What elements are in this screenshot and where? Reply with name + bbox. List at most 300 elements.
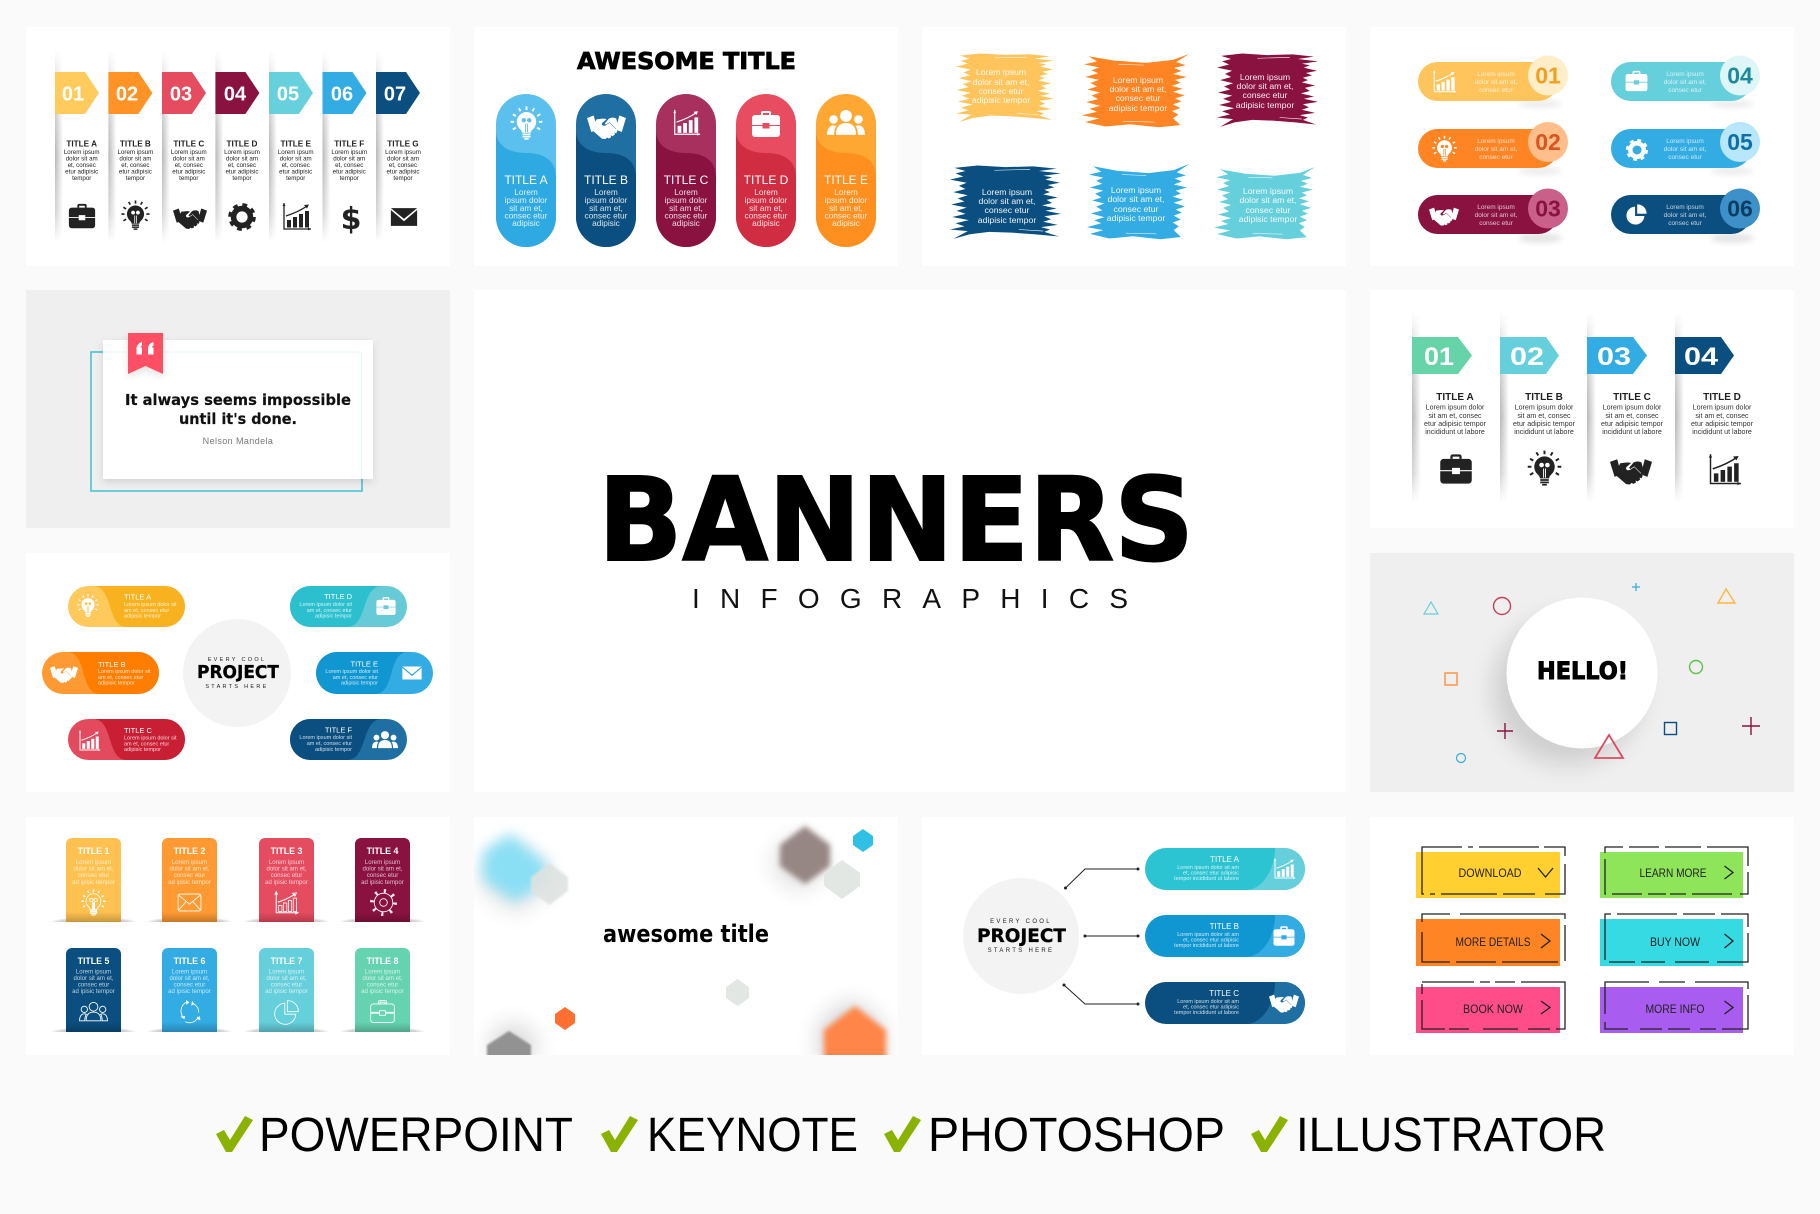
button: buy now [1600,914,1748,966]
card 8 [339,948,426,1032]
column 02: Lorem ipsum dolor [1515,404,1574,412]
card 2: ad ipisic tempor [168,879,211,886]
panel: every cool project with six pills [26,553,450,792]
pill 02: dolor sit am et, [1475,146,1518,153]
brush teal: adipisic tempor [1239,214,1297,224]
column 04 [1675,337,1754,485]
column 03: dolor sit am [173,156,205,162]
card 2: dolor sit am et, [170,866,210,872]
pill C: Lorem [674,187,698,197]
column 01: Lorem ipsum [64,149,100,156]
card 2: Lorem ipsum [172,859,207,866]
brush navy [950,166,1061,239]
panel: quote card [26,290,450,528]
pill A: tempor incididunt ut labore [1174,876,1239,882]
brush yellow: dolor sit am et, [973,77,1029,87]
pill C [1145,982,1305,1024]
pill 03: 03 [1535,196,1561,222]
small blue hexagon [853,829,873,852]
column 01: Lorem ipsum dolor [1426,404,1485,412]
card 8: TITLE 8 [367,956,398,966]
brush yellow: Lorem ipsum [976,67,1026,77]
pill 03: consec etur [1479,220,1514,227]
card 3 [243,838,330,922]
bookmark with quotation mark [128,333,163,374]
gray hexagon right [824,860,860,899]
column 05: et, consec [282,162,310,169]
pill E: TITLE E [350,660,378,668]
card 1 [50,838,137,922]
brush blue [1087,164,1189,239]
button: download: DOWNLOAD [1458,868,1522,880]
pill C: am et, consec etur [124,742,169,748]
column 03 [1587,337,1664,485]
panel: numbered pills [1370,27,1794,266]
pill B: TITLE B [584,173,628,187]
pill D: TITLE D [744,173,789,187]
pill B: ipsum dolor [585,195,628,205]
brush maroon: Lorem ipsum [1240,72,1290,82]
column 04: sit am et, consec [1695,412,1749,420]
pill D: adipisic tempor [315,614,352,620]
column 05 [269,72,314,230]
panel: center title [474,290,1346,792]
connector arrows [1062,868,1140,1006]
column 02: etur adipisic tempor [1513,420,1576,428]
column 03: Lorem ipsum dolor [1603,404,1662,412]
brush yellow: consec etur [979,86,1024,96]
card 5 [50,948,137,1032]
card 7: Lorem ipsum [269,968,304,976]
pill E [316,652,433,694]
pill F: adipisic tempor [315,747,352,753]
pill E [816,94,876,247]
column 03: 03 [170,84,192,106]
panel: seven numbered arrow columns [55,64,420,234]
pill 03: Lorem ipsum [1477,204,1515,211]
button: download [1416,847,1565,898]
column 01: TITLE A [1436,392,1474,403]
item: illustrator: ILLUSTRATOR [1296,1109,1606,1162]
column 02: Lorem ipsum [118,149,153,156]
column 03: 03 [1597,343,1631,371]
pill 05: Lorem ipsum [1666,138,1704,145]
pill E: adipisic [832,218,860,228]
card 7: ad ipisic tempor [265,988,308,995]
pill E: Lorem [834,187,858,197]
pill 05: dolor sit am et, [1664,146,1707,153]
card 3: Lorem ipsum [269,859,304,866]
column 04: dolor sit am [226,156,258,162]
center circle: PROJECT [197,663,279,683]
panel: hexagons with awesome title [474,824,892,1055]
quote text: until it's done. [179,410,297,428]
pill 05 [1611,122,1760,175]
pill C: et, consec etur adipisic [1183,1004,1239,1010]
column 03: tempor [179,175,198,182]
column 02: TITLE B [1525,392,1563,403]
pill 04: consec etur [1668,87,1703,94]
column 01: 01 [1424,343,1454,371]
card 4: consec etur [367,872,398,879]
decorative geometric shapes [1424,583,1760,762]
pill F: TITLE F [325,726,352,734]
pill D: Lorem ipsum dolor sit [299,602,352,608]
pill B: am et, consec etur [98,675,143,681]
column 03: TITLE C [173,140,204,148]
pill A: ipsum dolor [505,195,548,205]
pill E: Lorem ipsum dolor sit [325,669,378,675]
card 5: ad ipisic tempor [72,988,115,995]
column 02: 02 [1510,343,1544,371]
card 3: consec etur [271,872,302,879]
pill A: sit am et, [509,203,543,213]
column 06: $ [341,202,361,237]
pill A: TITLE A [124,592,151,602]
column 03: et, consec [175,162,203,169]
pill 05: 05 [1727,129,1753,155]
small orange hexagon [555,1007,575,1030]
column 01: et, consec [68,162,96,169]
panel: hello circle [1370,553,1794,792]
column 04: TITLE D [227,140,258,148]
column 04 [215,72,260,229]
card 2: TITLE 2 [174,846,205,856]
column 06 [322,72,367,237]
pill D: sit am et, [749,203,783,213]
pill 04 [1611,56,1760,108]
column 04: Lorem ipsum [224,149,260,156]
column 02: et, consec [121,162,150,169]
card 6: dolor sit am et, [170,975,210,982]
pill E: consec etur [825,210,868,220]
item: keynote: KEYNOTE [647,1109,858,1162]
brush orange: consec etur [1116,93,1161,103]
card 8: ad ipisic tempor [361,988,404,995]
card 8: dolor sit am et, [363,975,403,982]
column 02: incididunt ut labore [1514,428,1574,436]
card 3: dolor sit am et, [267,866,307,872]
pill 02 [1418,122,1568,175]
column 07: et, consec [389,162,417,169]
column 04: incididunt ut labore [1692,428,1752,436]
card 5: TITLE 5 [78,956,109,966]
card 1: ad ipisic tempor [72,879,115,886]
pill 01: 01 [1535,62,1561,88]
button: learn more [1600,847,1748,898]
brush blue: consec etur [1114,204,1159,214]
column 01: dolor sit am [66,156,98,162]
column 05: Lorem ipsum [278,149,314,156]
brush orange: dolor sit am et, [1110,84,1166,94]
pill 04: 04 [1727,62,1753,88]
card 6: TITLE 6 [174,956,205,966]
heading: awesome title: AWESOME TITLE [577,49,796,75]
pill E: sit am et, [829,203,863,213]
card 5: consec etur [78,982,109,988]
column 07: Lorem ipsum [385,149,421,156]
card 4: ad ipisic tempor [361,879,404,886]
card 1: TITLE 1 [78,846,109,856]
pill B: Lorem ipsum dolor sit am [1177,932,1239,938]
column 04: TITLE D [1703,392,1741,403]
card 6: Lorem ipsum [172,968,207,976]
pill C: tempor incididunt ut labore [1174,1010,1239,1016]
column 02: sit am et, consec [1517,412,1571,420]
panel: eight title cards [26,817,450,1055]
column 02: 02 [116,84,138,106]
pill A: consec etur [505,210,548,220]
pill B: sit am et, [589,203,623,213]
pill 03 [1418,188,1568,243]
pill B: consec etur [585,210,628,220]
column 07: dolor sit am [387,156,419,162]
column 06: dolor sit am [333,156,365,162]
pill D: consec etur [745,210,788,220]
card 8: consec etur [367,982,398,988]
pill F: am et, consec etur [307,741,352,747]
column 06: Lorem ipsum [331,149,367,156]
brush maroon: adipisic tempor [1236,100,1294,110]
column 01: etur adipisic [65,168,98,175]
center circle: STARTS HERE [205,684,269,690]
card 6: consec etur [174,982,205,988]
card 7 [243,948,330,1032]
quote text: It always seems impossible [125,391,351,409]
pill A: et, consec etur adipisic [1183,870,1239,876]
hello circle: HELLO! [1537,657,1628,685]
title text: awesome title [603,920,769,948]
card 1: dolor sit am et, [74,866,114,872]
button: more details: MORE DETAILS [1456,937,1531,949]
circle shadow [1493,615,1643,765]
hello circle [1506,598,1658,748]
column 01: etur adipisic tempor [1424,420,1487,428]
column 05: TITLE E [280,140,311,148]
column 02 [1500,337,1576,486]
card 7: TITLE 7 [271,956,302,966]
pill B [576,94,636,247]
pill 01: consec etur [1479,87,1514,94]
pill D: am et, consec etur [307,608,352,614]
column 04: 04 [224,84,247,106]
blurred orange hexagon [820,1000,886,1075]
pill C: adipisic [672,218,700,228]
column 02: dolor sit am [119,156,151,162]
brush orange [1082,54,1189,127]
pill B: adipisic tempor [98,680,135,686]
card 7: consec etur [271,982,302,988]
center circle: STARTS HERE [988,948,1054,954]
panel: brush strokes [922,27,1346,266]
pill F [290,719,407,760]
button: more details [1416,914,1565,966]
column 03: TITLE C [1613,392,1651,403]
author: Nelson Mandela [203,436,273,446]
pill C: adipisic tempor [124,747,161,753]
pill E: am et, consec etur [333,675,378,681]
pill B: et, consec etur adipisic [1183,938,1239,944]
column 04: etur adipisic [225,168,259,175]
column 01 [55,72,100,228]
pill C: Lorem ipsum dolor sit am [1177,999,1239,1005]
card 4: dolor sit am et, [363,866,403,872]
brush blue: Lorem ipsum [1111,185,1161,195]
pill A: am et, consec etur [124,608,169,614]
panel: project connector pills [922,817,1346,1055]
brush orange: Lorem ipsum [1113,75,1163,85]
brush blue: adipisic tempor [1107,213,1165,223]
brush navy: consec etur [985,205,1030,215]
center circle [183,619,291,727]
center circle [963,878,1079,994]
pill C: sit am et, [669,203,703,213]
pill D [736,94,796,247]
pill C: TITLE C [124,726,153,735]
column 02 [108,72,153,230]
pill A: TITLE A [1210,855,1240,864]
card 8: Lorem ipsum [365,968,400,976]
pill B: TITLE B [98,660,126,669]
button: more info: MORE INFO [1646,1004,1705,1016]
pill C [656,94,716,247]
column 04: etur adipisic tempor [1691,420,1754,428]
card 4: Lorem ipsum [365,859,400,866]
brush teal [1214,167,1315,239]
column 06: etur adipisic [333,168,366,175]
column 03: sit am et, consec [1605,412,1659,420]
brush maroon: dolor sit am et, [1237,81,1293,91]
pill E: adipisic tempor [341,680,378,686]
pill A [1145,848,1305,890]
card 1: consec etur [78,872,109,879]
column 01: TITLE A [66,140,97,148]
column 07: etur adipisic [386,168,420,175]
brush navy: dolor sit am et, [979,196,1035,206]
panel: awesome title pills [474,27,898,266]
column 01: 01 [62,84,84,106]
card 4 [339,838,426,922]
panel: call to action buttons [1370,817,1794,1055]
blurred blue hexagon [481,834,549,915]
pill A [68,586,185,627]
pill C: TITLE C [664,173,709,187]
pill 06: dolor sit am et, [1664,212,1707,219]
card 7: dolor sit am et, [267,975,307,982]
brush maroon: consec etur [1243,90,1288,100]
footer: software list [216,1109,1606,1162]
column 07: 07 [384,84,406,106]
pill 02: consec etur [1479,154,1514,161]
blurred brown hexagon [774,826,830,892]
column 03: Lorem ipsum [171,149,207,156]
brush yellow [956,53,1054,122]
center circle: EVERY COOL [208,657,266,663]
card 3: ad ipisic tempor [265,879,308,886]
pill 01: Lorem ipsum [1477,71,1515,78]
column 02: TITLE B [120,140,151,148]
column 05: tempor [286,175,305,182]
white card [103,340,373,479]
column 06: 06 [331,84,353,106]
column 06: TITLE F [334,140,364,148]
brush navy: Lorem ipsum [982,187,1032,197]
pill C: Lorem ipsum dolor sit [124,736,177,742]
center circle: EVERY COOL [990,919,1052,925]
gray hexagon left [531,863,568,905]
card 2: consec etur [174,872,205,879]
brush blue: dolor sit am et, [1108,194,1164,204]
pill B: tempor incididunt ut labore [1174,943,1239,949]
card 4: TITLE 4 [367,846,398,856]
pill A: adipisic tempor [124,614,161,620]
pill A: Lorem [514,187,538,197]
column 01: tempor [72,175,91,182]
pill A: Lorem ipsum dolor sit am [1177,865,1239,871]
center circle: PROJECT [977,925,1066,947]
column 04: et, consec [228,162,256,169]
brush teal: consec etur [1246,205,1291,215]
pill D: TITLE D [324,592,353,601]
pill C: consec etur [665,210,708,220]
pill A: adipisic [512,218,540,228]
button: book now: BOOK NOW [1463,1004,1523,1016]
quote text [125,391,351,428]
pill 03: dolor sit am et, [1475,212,1518,219]
item: photoshop: PHOTOSHOP [928,1109,1225,1162]
subheading: INFOGRAPHICS [692,583,1128,614]
column 05: dolor sit am [280,156,312,162]
pill E: ipsum dolor [825,195,868,205]
pill B: TITLE B [1210,922,1239,931]
card 6: ad ipisic tempor [168,988,211,995]
column 02: tempor [126,175,145,182]
pill 01 [1418,56,1568,108]
column 04: tempor [232,175,252,182]
brush orange: adipisic tempor [1109,103,1167,113]
brush maroon [1217,54,1318,127]
pill 01: dolor sit am et, [1475,79,1518,86]
brush yellow: adipisic tempor [972,95,1030,105]
pill D: Lorem [754,187,778,197]
pill C: TITLE C [1209,989,1239,998]
button: more info [1600,982,1748,1033]
panel: four numbered columns [1412,326,1753,494]
teal outline frame [91,352,362,491]
button: buy now: BUY NOW [1650,937,1700,949]
pill E: TITLE E [824,173,868,187]
pill A: Lorem ipsum dolor sit [124,602,177,608]
column 04: Lorem ipsum dolor [1693,404,1752,412]
brush navy: adipisic tempor [978,215,1036,225]
column 03 [162,72,207,229]
card 3: TITLE 3 [271,846,302,856]
pill C: ipsum dolor [665,195,708,205]
pill 04: dolor sit am et, [1664,79,1707,86]
pill 06: consec etur [1668,220,1703,227]
column 07: tempor [393,175,413,182]
pill 06: Lorem ipsum [1666,204,1704,211]
pill B [42,652,159,694]
pill A: TITLE A [504,173,548,187]
pill 06: 06 [1727,196,1753,222]
column 02: etur adipisic [119,168,152,175]
pill 04: Lorem ipsum [1666,71,1704,78]
pill B: Lorem ipsum dolor sit [98,669,151,675]
pill D: adipisic [752,218,780,228]
brush teal: dolor sit am et, [1240,195,1296,205]
pill A [496,94,556,247]
